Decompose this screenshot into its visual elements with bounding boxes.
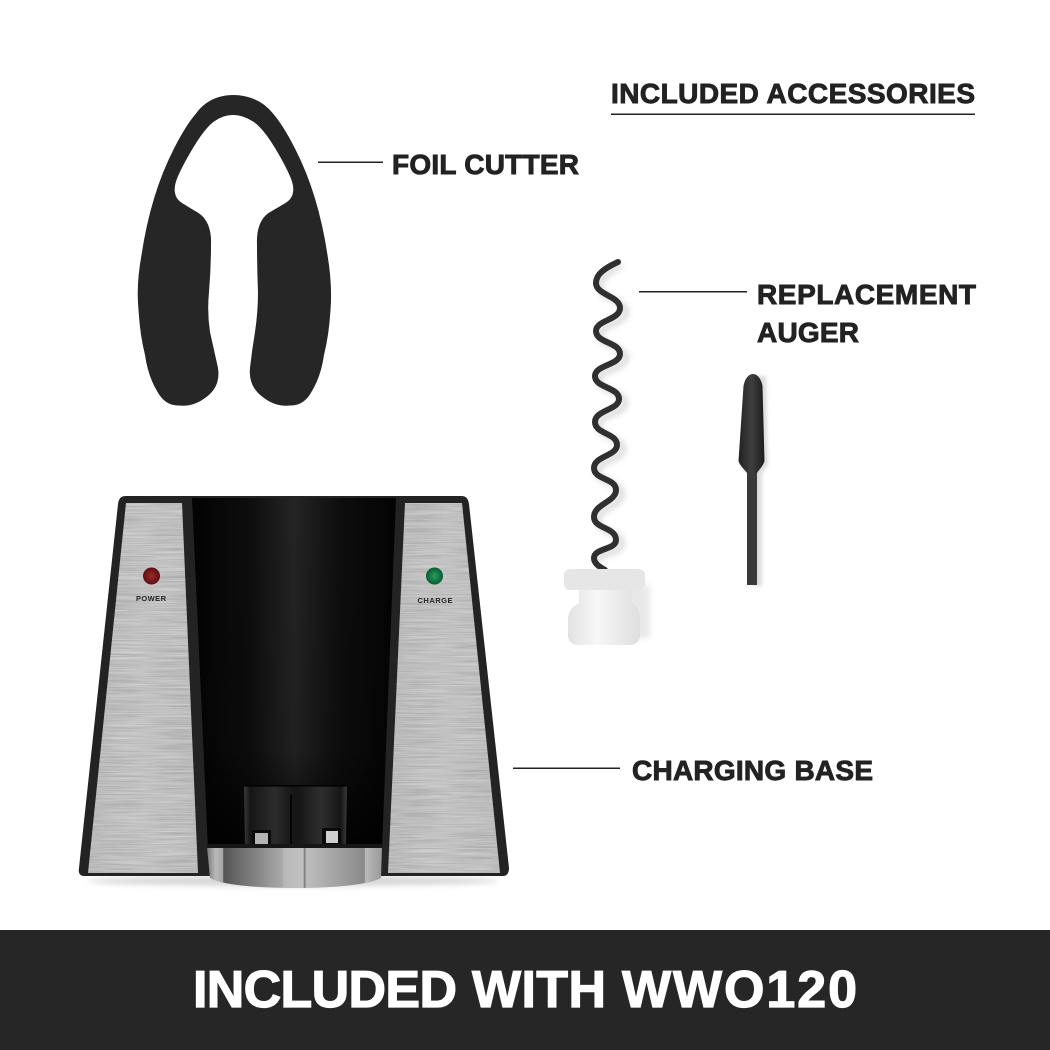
steel collar <box>207 844 382 888</box>
footer title: WWO120 <box>622 961 857 1019</box>
callout: replacement auger: AUGER <box>757 317 859 348</box>
auger plug <box>564 569 650 645</box>
callout: foil cutter: FOIL CUTTER <box>392 149 579 180</box>
callout: replacement auger: REPLACEMENT <box>757 279 976 310</box>
charging cup <box>192 498 396 848</box>
base body <box>79 496 509 876</box>
power indicator <box>136 568 167 603</box>
icon: replacement auger <box>564 262 650 645</box>
icon: foil cutter pin <box>738 374 768 586</box>
right steel panel <box>388 503 500 873</box>
charging base <box>79 496 509 888</box>
charge indicator <box>418 568 452 605</box>
footer title: WITH <box>472 961 606 1019</box>
base shadow <box>88 876 498 886</box>
callout: charging base: CHARGING BASE <box>632 755 873 786</box>
footer title: INCLUDED <box>193 961 457 1019</box>
heading: included accessories: INCLUDED ACCESSORIES <box>611 78 975 109</box>
charge indicator: CHARGE <box>418 596 452 605</box>
icon: foil cutter <box>138 95 331 406</box>
power indicator: POWER <box>136 594 167 603</box>
charging post <box>244 785 347 846</box>
left steel panel <box>88 503 198 873</box>
callout: replacement auger <box>639 279 976 348</box>
footer band <box>0 930 1050 1050</box>
footer title <box>193 961 857 1019</box>
